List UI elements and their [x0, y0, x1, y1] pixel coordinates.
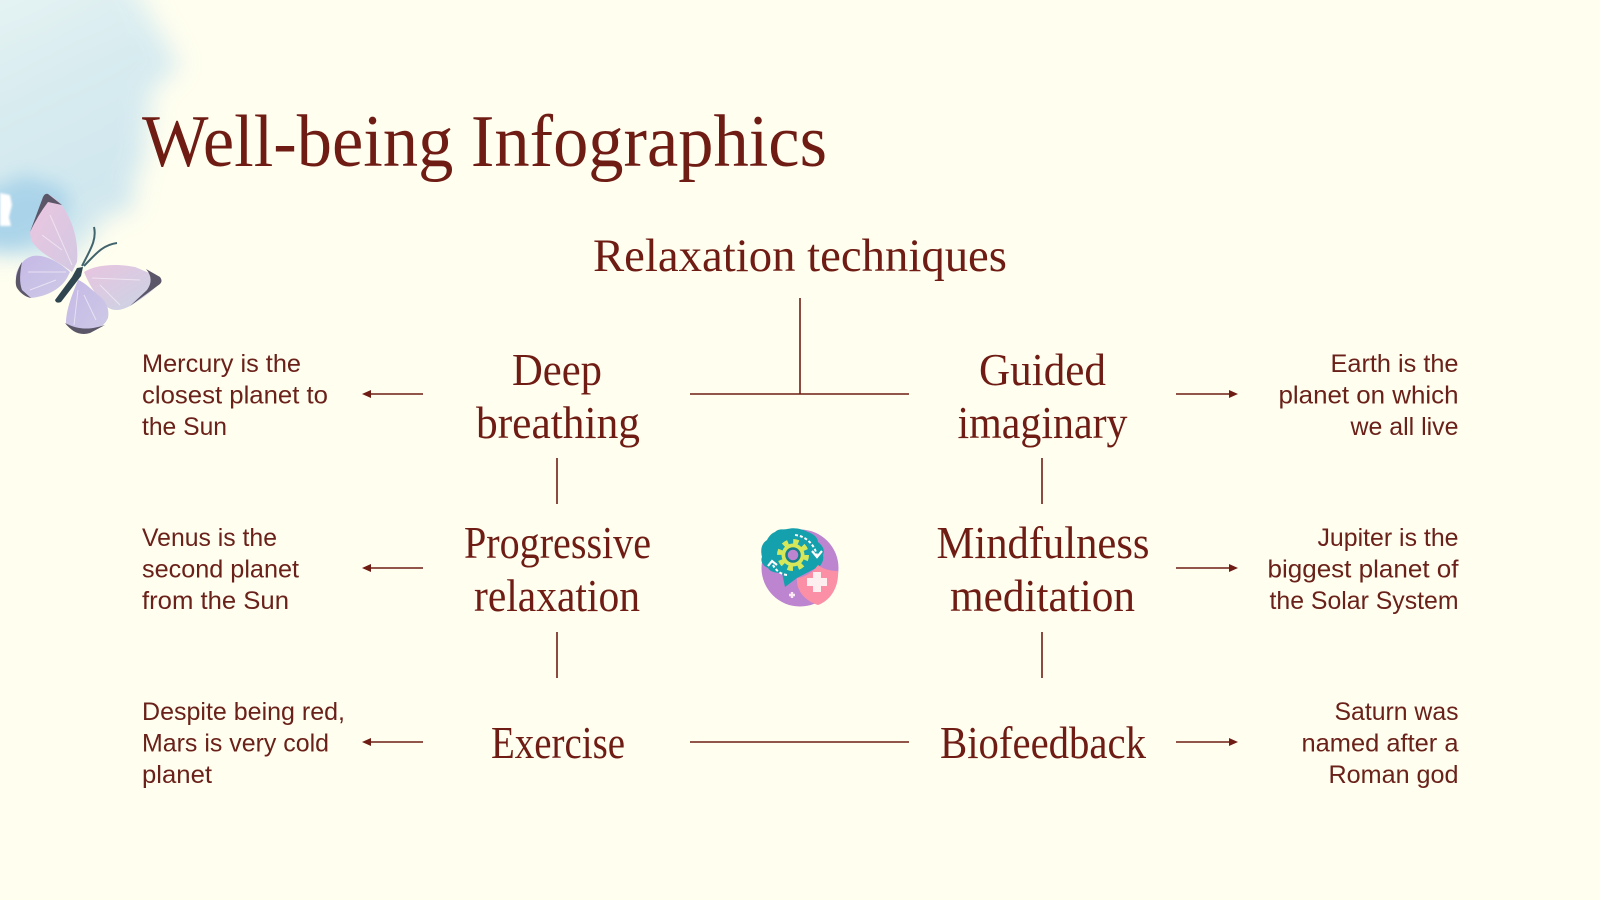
text: Earth: planet on which: [1278, 382, 1458, 410]
text: Venus: second planet: [142, 556, 299, 584]
refresh arrows: [772, 535, 817, 575]
arrow: right row 2: [1176, 564, 1238, 572]
wing veins: [28, 215, 140, 325]
sparkle: [789, 592, 795, 598]
node: Mindfulness meditation: Mindfulness: [936, 517, 1150, 568]
text: Mars: Mars is very cold: [142, 730, 329, 758]
text: Mercury: [142, 350, 328, 441]
node: Deep breathing: Deep: [512, 344, 602, 395]
lower left wing: [16, 256, 70, 298]
cross: [807, 572, 827, 592]
text: Jupiter: [1268, 524, 1459, 615]
lower right wing: [66, 280, 108, 333]
text: Earth: we all live: [1350, 413, 1458, 441]
gear: [782, 544, 804, 566]
text: Venus: Venus is the: [142, 524, 277, 552]
node: Guided imaginary: Guided: [979, 344, 1106, 395]
text: Jupiter: biggest planet of: [1268, 556, 1459, 584]
text: Jupiter: the Solar System: [1270, 587, 1458, 615]
node: Biofeedback: Biofeedback: [940, 717, 1146, 768]
node: Mindfulness meditation: [936, 517, 1150, 621]
node: Progressive relaxation: [464, 517, 651, 621]
text: Earth: Earth is the: [1330, 350, 1458, 378]
text: Saturn: named after a: [1302, 730, 1459, 758]
node: Progressive relaxation: relaxation: [474, 570, 640, 621]
arrow: right row 1: [1176, 390, 1238, 398]
text: Mars: [142, 698, 345, 789]
connector lines: [557, 298, 1042, 742]
node: Exercise: Exercise: [491, 717, 625, 768]
antennae: [82, 227, 117, 266]
upper left wing: [30, 194, 77, 272]
node: Guided imaginary: [958, 344, 1128, 448]
text: Mercury: Mercury is the: [142, 350, 301, 378]
thought cloud: [761, 528, 824, 587]
text: Mars: planet: [142, 761, 212, 789]
arrow: left row 2: [362, 564, 423, 572]
arrow: left row 3: [362, 738, 423, 746]
watercolor blue wash: [0, 0, 180, 262]
text: Earth: [1278, 350, 1458, 441]
text: Saturn: Saturn was: [1334, 698, 1458, 726]
node: Deep breathing: breathing: [476, 397, 640, 448]
icon: well-being: [761, 528, 838, 606]
upper right wing: [84, 265, 161, 310]
text: Jupiter: Jupiter is the: [1318, 524, 1458, 552]
heading: Relaxation techniques: Relaxation techniques: [593, 230, 1007, 282]
title: Well-being Infographics: [142, 101, 827, 183]
arrow: right row 3: [1176, 738, 1238, 746]
text: Mercury: closest planet to: [142, 382, 328, 410]
body: [55, 267, 83, 303]
node: Deep breathing: [476, 344, 640, 448]
text: Mercury: the Sun: [142, 413, 227, 441]
icon: butterfly: [16, 194, 162, 334]
node: Mindfulness meditation: meditation: [950, 570, 1135, 621]
shield: [797, 565, 838, 605]
text: Venus: [142, 524, 299, 615]
text: Venus: from the Sun: [142, 587, 289, 615]
text: Saturn: Roman god: [1328, 761, 1458, 789]
node: Guided imaginary: imaginary: [958, 397, 1128, 448]
text: Saturn: [1302, 698, 1459, 789]
arrow: left row 1: [362, 390, 423, 398]
text: Mars: Despite being red,: [142, 698, 345, 726]
node: Progressive relaxation: Progressive: [464, 517, 651, 568]
